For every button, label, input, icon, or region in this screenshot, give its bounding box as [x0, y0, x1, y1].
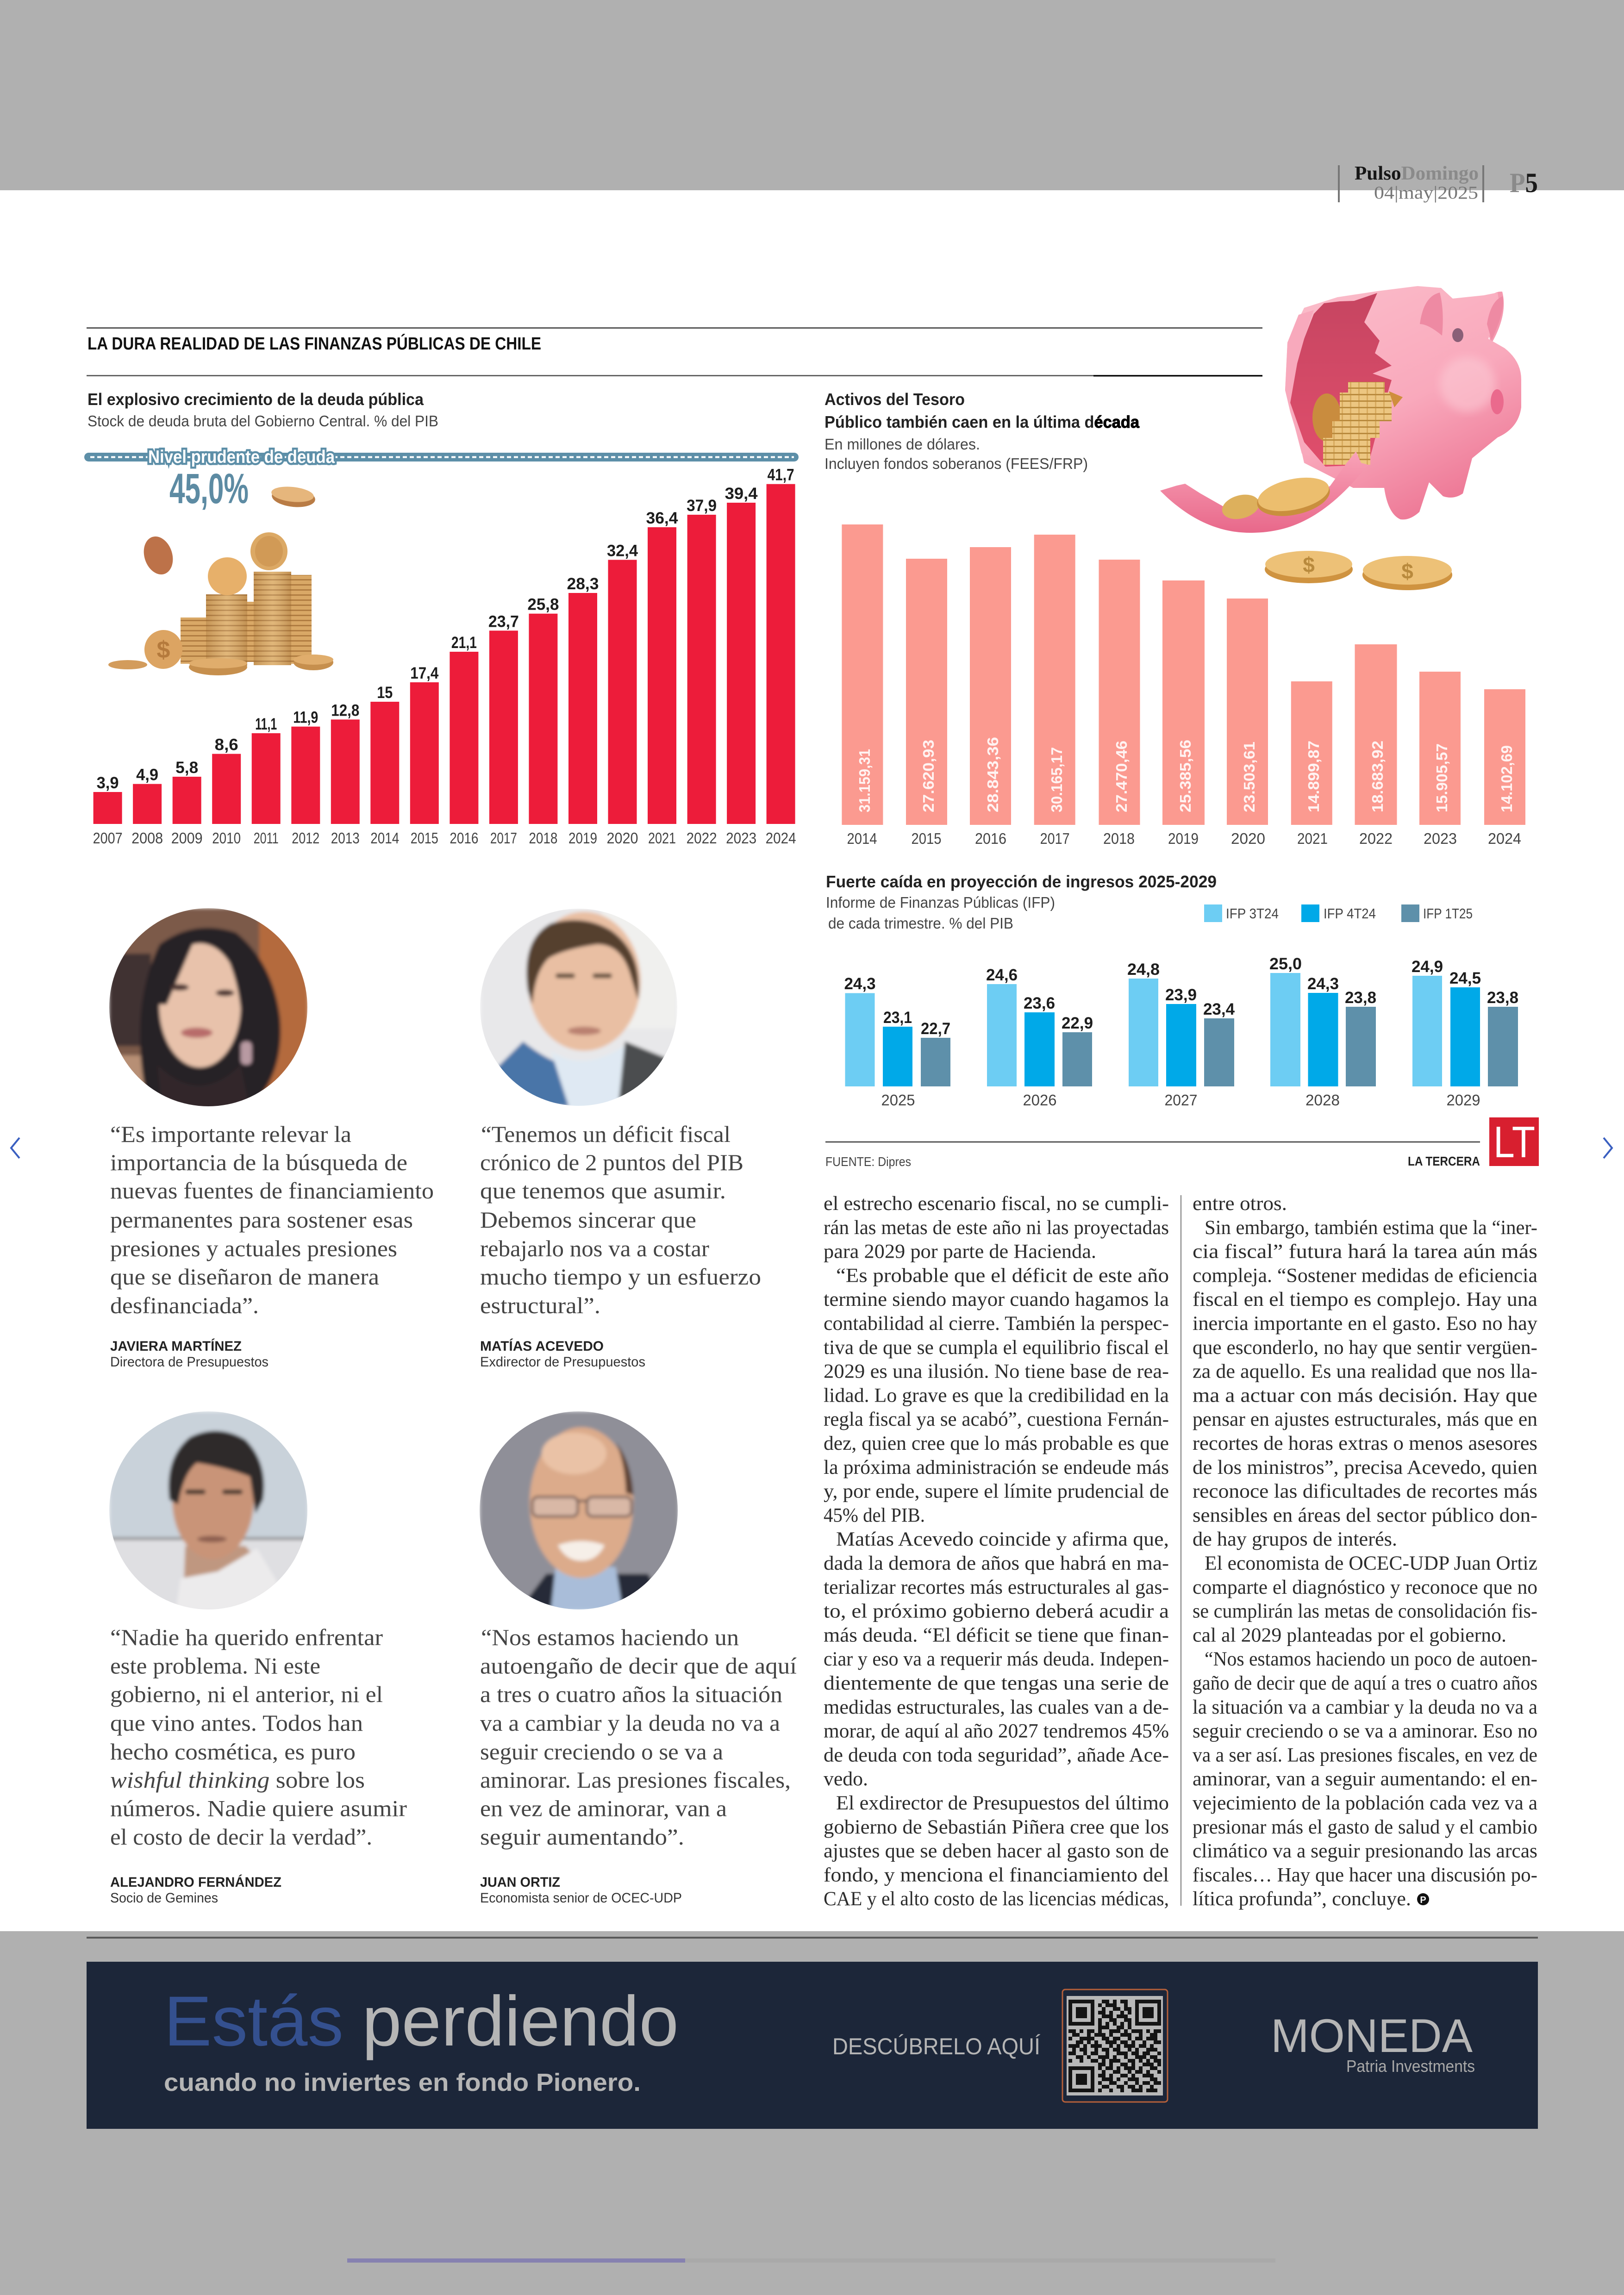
article text: column 1: El exdirector de Presupuestos del último	[836, 1792, 1169, 1814]
bar values: income projection: 22,7	[921, 1020, 950, 1038]
article text: column 2: aminorar, van a seguir aumentando: el en-	[1193, 1768, 1537, 1790]
logo: La Tercera: LT	[1493, 1117, 1535, 1167]
article text: column 1: Matías Acevedo coincide y afirma que,	[836, 1528, 1169, 1550]
bar chart: debt 2007-2024	[94, 484, 795, 824]
quote: Javiera Martínez: nuevas fuentes de financiamiento	[110, 1178, 434, 1204]
article text: column 2: Sin embargo, también estima que la “iner-	[1205, 1217, 1537, 1239]
prudent debt level line	[84, 447, 799, 512]
panel: treasury assets chart	[824, 390, 1525, 847]
article text: column 2: de hay grupos de interés.	[1193, 1528, 1397, 1550]
article text: column 2: reconoce las dificultades de recortes más	[1193, 1481, 1537, 1503]
quote: Matías Acevedo: que tenemos que asumir.	[480, 1178, 726, 1204]
prudent debt level line: 45,0%	[169, 465, 249, 512]
x axis years: treasury assets: 2015	[911, 830, 942, 847]
x axis years: debt: 2017	[490, 829, 517, 847]
page header: P5	[1510, 168, 1538, 198]
bar values: debt	[97, 466, 794, 792]
portrait: Juan Ortiz	[480, 1411, 679, 1611]
ad headline: cuando no inviertes en fondo Pionero.	[164, 2069, 641, 2096]
x axis years: income projection: 2029	[1446, 1091, 1480, 1109]
article text: column 2: gaño de decir que de aquí a tres o cuatro años	[1193, 1672, 1537, 1694]
x axis years: treasury assets: 2020	[1231, 830, 1265, 847]
quote: Juan Ortiz: en vez de aminorar, van a	[480, 1795, 727, 1821]
bar values: treasury assets: 15.905,57	[1433, 743, 1450, 812]
quote: Alejandro Fernández: wishful thinking sobre los	[110, 1767, 365, 1793]
bar values: debt: 28,3	[567, 575, 599, 593]
bar values: income projection	[844, 955, 1518, 1038]
x axis years: treasury assets: 2022	[1359, 830, 1393, 847]
quote: Matías Acevedo: MATÍAS ACEVEDO	[480, 1338, 604, 1354]
article text: column 1: el estrecho escenario fiscal, no se cumpli-	[824, 1193, 1169, 1215]
legend: IFP 3T24	[1226, 905, 1279, 922]
icon: broken piggy bank: $	[1303, 553, 1315, 577]
x axis years: income projection: 2026	[1023, 1091, 1056, 1109]
ad headline: Estás	[164, 1982, 344, 2061]
quote: Alejandro Fernández: ALEJANDRO FERNÁNDEZ	[110, 1874, 281, 1890]
logo: Moneda Patria Investments: MONEDA	[1271, 2009, 1473, 2062]
article text: column 1: rán las metas de este año ni las proyectadas	[824, 1217, 1169, 1239]
article text: column 2: sensibles en áreas del sector público don-	[1193, 1504, 1537, 1526]
bar values: debt: 17,4	[410, 664, 439, 682]
article text: column 1: gobierno de Sebastián Piñera cree que los	[824, 1816, 1169, 1838]
quote: Alejandro Fernández: hecho cosmética, es puro	[110, 1739, 356, 1765]
bar values: income projection: 23,6	[1024, 994, 1055, 1012]
bar values: income projection: 24,6	[986, 966, 1018, 984]
x axis years: treasury assets: 2019	[1168, 830, 1199, 847]
ad headline: perdiendo	[362, 1982, 679, 2061]
arrow: next page	[1604, 1138, 1612, 1158]
quote: Alejandro Fernández	[110, 1624, 407, 1906]
quote: Juan Ortiz: a tres o cuatro años la situación	[480, 1681, 782, 1707]
ad headline	[164, 1982, 679, 2096]
quote: Matías Acevedo: rebajarlo nos va a costar	[480, 1235, 709, 1261]
bar values: treasury assets: 25.385,56	[1177, 740, 1194, 812]
x axis years: debt: 2010	[212, 829, 241, 847]
bar values: treasury assets: 30.165,17	[1048, 747, 1065, 812]
page header	[1338, 163, 1538, 203]
quote: Alejandro Fernández: que vino antes. Todos han	[110, 1710, 363, 1736]
x axis years: debt: 2023	[726, 829, 756, 847]
x axis years: debt: 2020	[606, 829, 638, 847]
bar values: treasury assets: 14.899,87	[1305, 741, 1322, 812]
article text: column 1: terializar recortes más estructurales al gas-	[824, 1577, 1169, 1598]
bar values: treasury assets: 28.843,36	[984, 737, 1001, 812]
legend: IFP 1T25	[1423, 905, 1473, 922]
bar values: income projection: 24,8	[1127, 960, 1160, 979]
bar values: debt: 12,8	[331, 701, 359, 719]
bar values: debt: 39,4	[725, 485, 758, 503]
article text: column 1: regla fiscal ya se acabó”, cuestiona Fernán-	[824, 1409, 1169, 1430]
quote: Alejandro Fernández: números. Nadie quiere asumir	[110, 1795, 407, 1821]
x axis years: debt: 2021	[648, 829, 676, 847]
bar values: income projection: 23,9	[1165, 986, 1197, 1004]
chart heading	[826, 872, 1217, 932]
quote: Juan Ortiz: “Nos estamos haciendo un	[481, 1624, 739, 1650]
quote: Javiera Martínez: permanentes para sostener esas	[110, 1207, 413, 1233]
prudent debt level line: Nivel prudente de deuda	[148, 447, 335, 467]
icon: QR code	[1062, 1989, 1168, 2102]
chart heading: El explosivo crecimiento de la deuda pública	[87, 390, 424, 409]
main title	[87, 327, 1262, 377]
article text: column 1: ciar y eso va a requerir más deuda. Indepen-	[824, 1648, 1169, 1670]
x axis years: debt: 2011	[254, 829, 279, 847]
article text: column 2: inercia importante en el gasto. Eso no hay	[1193, 1313, 1538, 1335]
article text: column 2: entre otros.	[1193, 1193, 1287, 1215]
bar values: debt: 37,9	[687, 497, 717, 515]
quote: Javiera Martínez: Directora de Presupuestos	[110, 1354, 269, 1370]
bar values: income projection: 25,0	[1269, 955, 1302, 973]
bar values: income projection: 24,3	[1307, 975, 1339, 993]
x axis years: income projection: 2027	[1165, 1091, 1197, 1109]
article text: column 2: de los ministros”, precisa Acevedo, quien	[1193, 1457, 1537, 1478]
article text: column 2: compleja. “Sostener medidas de eficiencia	[1193, 1265, 1537, 1286]
bar values: income projection: 23,1	[883, 1009, 912, 1027]
bar values: debt: 25,8	[527, 596, 559, 614]
article text: column 2: lítica profunda”, concluye.	[1193, 1888, 1411, 1910]
bar values: debt: 11,9	[293, 709, 318, 727]
bar values: income projection: 23,8	[1345, 989, 1376, 1007]
legend	[1204, 904, 1473, 922]
x axis years: debt: 2018	[529, 829, 557, 847]
quote: Juan Ortiz: aminorar. Las presiones fiscales,	[480, 1767, 791, 1793]
quote: Matías Acevedo: Debemos sincerar que	[480, 1207, 696, 1233]
x axis years: debt: 2013	[331, 829, 360, 847]
article text: column 2: climático va a seguir presionando las arcas	[1193, 1840, 1537, 1862]
quote: Matías Acevedo: crónico de 2 puntos del PIB	[480, 1149, 743, 1175]
advertisement banner	[87, 1962, 1538, 2129]
bar values: debt: 4,9	[136, 766, 158, 784]
main title: LA DURA REALIDAD DE LAS FINANZAS PÚBLICAS DE CHILE	[87, 333, 541, 354]
logo: Moneda Patria Investments: Patria Investments	[1346, 2057, 1475, 2076]
quote: Alejandro Fernández: el costo de decir la verdad”.	[110, 1824, 372, 1850]
bar values: debt: 36,4	[646, 509, 678, 527]
portrait: Javiera Martínez	[109, 908, 308, 1111]
article text: column 2: cia fiscal” futura hará la tarea aún más	[1193, 1241, 1537, 1263]
panel: newspaper page	[0, 190, 1624, 1931]
article text: column 2: cal al 2029 planteadas por el gobierno.	[1193, 1624, 1506, 1646]
x axis years: debt: 2008	[131, 829, 163, 847]
portrait: Alejandro Fernández	[109, 1411, 308, 1613]
article text: column 2: ma a actuar con más decisión. Hay que	[1193, 1384, 1537, 1406]
quote: Alejandro Fernández: gobierno, ni el anterior, ni el	[110, 1681, 383, 1707]
icon: coins stack	[108, 485, 333, 675]
bar values: treasury assets: 14.102,69	[1498, 745, 1515, 812]
x axis years: treasury assets: 2024	[1488, 830, 1521, 847]
ad call to action: DESCÚBRELO AQUÍ	[832, 2033, 1040, 2059]
quote: Alejandro Fernández: este problema. Ni este	[110, 1653, 320, 1678]
article text: column 1: contabilidad al cierre. También la perspec-	[824, 1313, 1169, 1335]
quote: Matías Acevedo: estructural”.	[480, 1292, 600, 1318]
quote: Matías Acevedo: “Tenemos un déficit fiscal	[481, 1121, 731, 1147]
article text: column 1: morar, de aquí al año 2027 tendremos 45%	[824, 1721, 1169, 1742]
arrow: previous page	[11, 1138, 19, 1158]
quote: Javiera Martínez: presiones y actuales presiones	[110, 1235, 397, 1261]
article text: column 2: se cumplirán las metas de consolidación fis-	[1193, 1601, 1537, 1622]
x axis years: debt: 2007	[93, 829, 123, 847]
icon: broken piggy bank: $	[1401, 559, 1413, 583]
bar values: treasury assets: 27.470,46	[1113, 741, 1130, 812]
article text: column 2: recortes de horas extras o menos asesores	[1193, 1433, 1537, 1454]
bar values: debt: 15	[377, 684, 393, 702]
bar values: debt: 8,6	[215, 736, 238, 754]
x axis years: income projection: 2028	[1305, 1091, 1340, 1109]
article text: column 1: “Es probable que el déficit de este año	[836, 1265, 1169, 1286]
icon: broken piggy bank	[1160, 286, 1521, 590]
bar values: treasury assets: 18.683,92	[1369, 741, 1386, 812]
x axis years: treasury assets	[847, 830, 1521, 847]
chart heading: Fuerte caída en proyección de ingresos 2025-2029	[826, 872, 1217, 891]
article text: column 1: termine siendo mayor cuando hagamos la	[824, 1289, 1169, 1310]
chart heading: de cada trimestre. % del PIB	[828, 915, 1013, 932]
quote: Juan Ortiz: seguir aumentando”.	[480, 1824, 684, 1850]
x axis years: debt: 2015	[411, 829, 438, 847]
x axis years: debt: 2022	[687, 829, 717, 847]
bar values: treasury assets: 31.159,31	[856, 749, 873, 812]
chart heading	[87, 390, 438, 430]
x axis years: treasury assets: 2018	[1103, 830, 1135, 847]
grouped bar chart: 2025-2029	[845, 973, 1518, 1086]
article text: column 1: tiva de que se cumpla el equilibrio fiscal el	[824, 1337, 1169, 1359]
article text: column 1: de deuda con toda seguridad”, añade Ace-	[824, 1744, 1169, 1766]
bar values: treasury assets: 27.620,93	[920, 740, 937, 812]
article text: column 2	[1193, 1193, 1538, 1910]
x axis years: debt: 2009	[171, 829, 203, 847]
page header: PulsoDomingo	[1355, 163, 1479, 184]
article text: column 1: y, por ende, supere el límite prudencial de	[824, 1481, 1169, 1503]
article text: column 1: 2029 es una ilusión. No tiene base de rea-	[824, 1361, 1169, 1383]
article text: column 1: la próxima administración se endeude más	[824, 1457, 1169, 1478]
quote: Javiera Martínez: que se diseñaron de manera	[110, 1264, 379, 1290]
quote: Javiera Martínez: desfinanciada”.	[110, 1292, 259, 1318]
article text: column 1: dada la demora de años que habrá en ma-	[824, 1553, 1169, 1574]
panel: public debt chart	[84, 390, 799, 847]
quote: Alejandro Fernández: “Nadie ha querido enfrentar	[110, 1624, 383, 1650]
chart heading: Público también caen en la última década	[824, 412, 1140, 431]
bar values: debt: 11,1	[255, 715, 277, 733]
article text: column 1: to, el próximo gobierno deberá acudir a	[824, 1601, 1169, 1622]
article text: column 1: dez, quien cree que lo más probable es que	[824, 1433, 1169, 1454]
portrait: Matías Acevedo	[480, 908, 677, 1109]
chart heading: Stock de deuda bruta del Gobierno Central. % del PIB	[87, 412, 438, 430]
bar values: debt: 32,4	[607, 542, 638, 560]
x axis years: income projection	[881, 1091, 1480, 1109]
article text: column 2: vejecimiento de la población cada vez va a	[1193, 1792, 1537, 1814]
bar values: debt: 41,7	[768, 466, 794, 484]
article text: column 1: fondo, y menciona el financiamiento del	[824, 1864, 1169, 1886]
page header: 04|may|2025	[1374, 183, 1478, 203]
article text: column 2: presionar más el gasto de salud y el cambio	[1193, 1816, 1537, 1838]
x axis years: income projection: 2025	[881, 1091, 915, 1109]
quote: Juan Ortiz: JUAN ORTIZ	[480, 1875, 560, 1890]
x axis years: debt	[93, 829, 796, 847]
article text: column 2: la situación va a cambiar y la deuda no va a	[1193, 1696, 1537, 1718]
quote: Javiera Martínez: importancia de la búsqueda de	[110, 1149, 407, 1175]
article text: column 2: P	[1420, 1895, 1426, 1905]
source footer: FUENTE: Dipres	[825, 1154, 911, 1169]
bar values: income projection: 23,8	[1487, 989, 1518, 1007]
chart heading: En millones de dólares.	[824, 436, 980, 453]
quote: Matías Acevedo	[480, 1121, 761, 1370]
x axis years: treasury assets: 2017	[1040, 830, 1070, 847]
article text: column 1: para 2029 por parte de Hacienda.	[824, 1241, 1096, 1263]
x axis years: treasury assets: 2021	[1297, 830, 1328, 847]
chart heading: Incluyen fondos soberanos (FEES/FRP)	[824, 455, 1088, 472]
article text: column 2: fiscal en el tiempo es complejo. Hay una	[1193, 1289, 1537, 1310]
article text: column 2: comparte el diagnóstico y reconoce que no	[1193, 1577, 1537, 1598]
x axis years: treasury assets: 2023	[1424, 830, 1457, 847]
article text: column 1: ajustes que se deben hacer al gasto son de	[824, 1840, 1169, 1862]
quote: Javiera Martínez	[110, 1121, 434, 1370]
bar values: income projection: 24,5	[1449, 969, 1481, 987]
article text: column 1: dientemente de que tengas una serie de	[824, 1672, 1169, 1694]
bar values: treasury assets	[856, 737, 1515, 812]
article text: column 1: vedo.	[824, 1768, 868, 1790]
chart heading: Informe de Finanzas Públicas (IFP)	[826, 894, 1055, 911]
quote: Matías Acevedo: Exdirector de Presupuestos	[480, 1354, 645, 1370]
article text: column 1: 45% del PIB.	[824, 1504, 925, 1526]
quote: Matías Acevedo: mucho tiempo y un esfuerzo	[480, 1264, 761, 1290]
x axis years: debt: 2019	[568, 829, 597, 847]
legend: IFP 4T24	[1324, 905, 1376, 922]
bar values: income projection: 24,9	[1412, 958, 1443, 976]
article text: column 2: El economista de OCEC-UDP Juan Ortiz	[1205, 1553, 1537, 1574]
quote: Juan Ortiz: autoengaño de decir que de aquí	[480, 1653, 797, 1678]
bar values: income projection: 22,9	[1062, 1014, 1093, 1032]
x axis years: treasury assets: 2016	[975, 830, 1006, 847]
article text: column 1: lidad. Lo grave es que la credibilidad en la	[824, 1384, 1169, 1406]
article text: column 2: “Nos estamos haciendo un poco de autoen-	[1205, 1648, 1537, 1670]
bar values: debt: 21,1	[451, 634, 477, 652]
quote: Juan Ortiz	[480, 1624, 797, 1906]
bar values: debt: 23,7	[488, 612, 519, 630]
x axis years: treasury assets: 2014	[847, 830, 877, 847]
x axis years: debt: 2014	[370, 829, 399, 847]
article text: column 1: CAE y el alto costo de las licencias médicas,	[824, 1888, 1169, 1910]
article text: column 2: pensar en ajustes estructurales, más que en	[1193, 1409, 1537, 1430]
article text: column 2: seguir creciendo o se va a aminorar. Eso no	[1193, 1721, 1537, 1742]
quote: Javiera Martínez: JAVIERA MARTÍNEZ	[110, 1338, 242, 1354]
quote: Juan Ortiz: Economista senior de OCEC-UDP	[480, 1890, 682, 1906]
quote: Javiera Martínez: “Es importante relevar la	[110, 1121, 351, 1147]
article text: column 2: fiscales… Hay que hacer una discusión po-	[1193, 1864, 1537, 1886]
bar values: income projection: 23,4	[1203, 1000, 1235, 1018]
bar values: debt: 5,8	[175, 759, 198, 777]
source footer	[825, 1141, 1480, 1169]
article text: column 1	[824, 1193, 1169, 1910]
chart heading	[824, 390, 1140, 472]
article text: column 2: que esconderlo, no hay que sentir vergüen-	[1193, 1337, 1537, 1359]
bar values: income projection: 24,3	[844, 975, 876, 993]
bar values: debt: 3,9	[97, 774, 119, 792]
progress bar	[347, 2258, 1275, 2263]
article text: column 2: za de aquello. Es una realidad que nos lla-	[1193, 1361, 1537, 1383]
quote: Alejandro Fernández: Socio de Gemines	[110, 1890, 218, 1906]
bar chart: treasury assets 2014-2024	[842, 524, 1525, 825]
article text: column 2: va a ser así. Las presiones fiscales, en vez de	[1193, 1744, 1537, 1766]
x axis years: debt: 2024	[766, 829, 796, 847]
quote: Juan Ortiz: seguir creciendo o se va a	[480, 1739, 723, 1765]
article text: column 1: más deuda. “El déficit se tiene que finan-	[824, 1624, 1169, 1646]
panel: income projection chart	[826, 872, 1518, 1109]
quote: Juan Ortiz: va a cambiar y la deuda no va a	[480, 1710, 780, 1736]
article text: column 1: medidas estructurales, las cuales van a de-	[824, 1696, 1169, 1718]
chart heading: Activos del Tesoro	[824, 390, 965, 409]
source footer: LA TERCERA	[1408, 1154, 1480, 1168]
x axis years: debt: 2012	[292, 829, 319, 847]
x axis years: debt: 2016	[450, 829, 478, 847]
bar values: treasury assets: 23.503,61	[1241, 742, 1258, 812]
icon: coins stack: $	[157, 636, 170, 663]
